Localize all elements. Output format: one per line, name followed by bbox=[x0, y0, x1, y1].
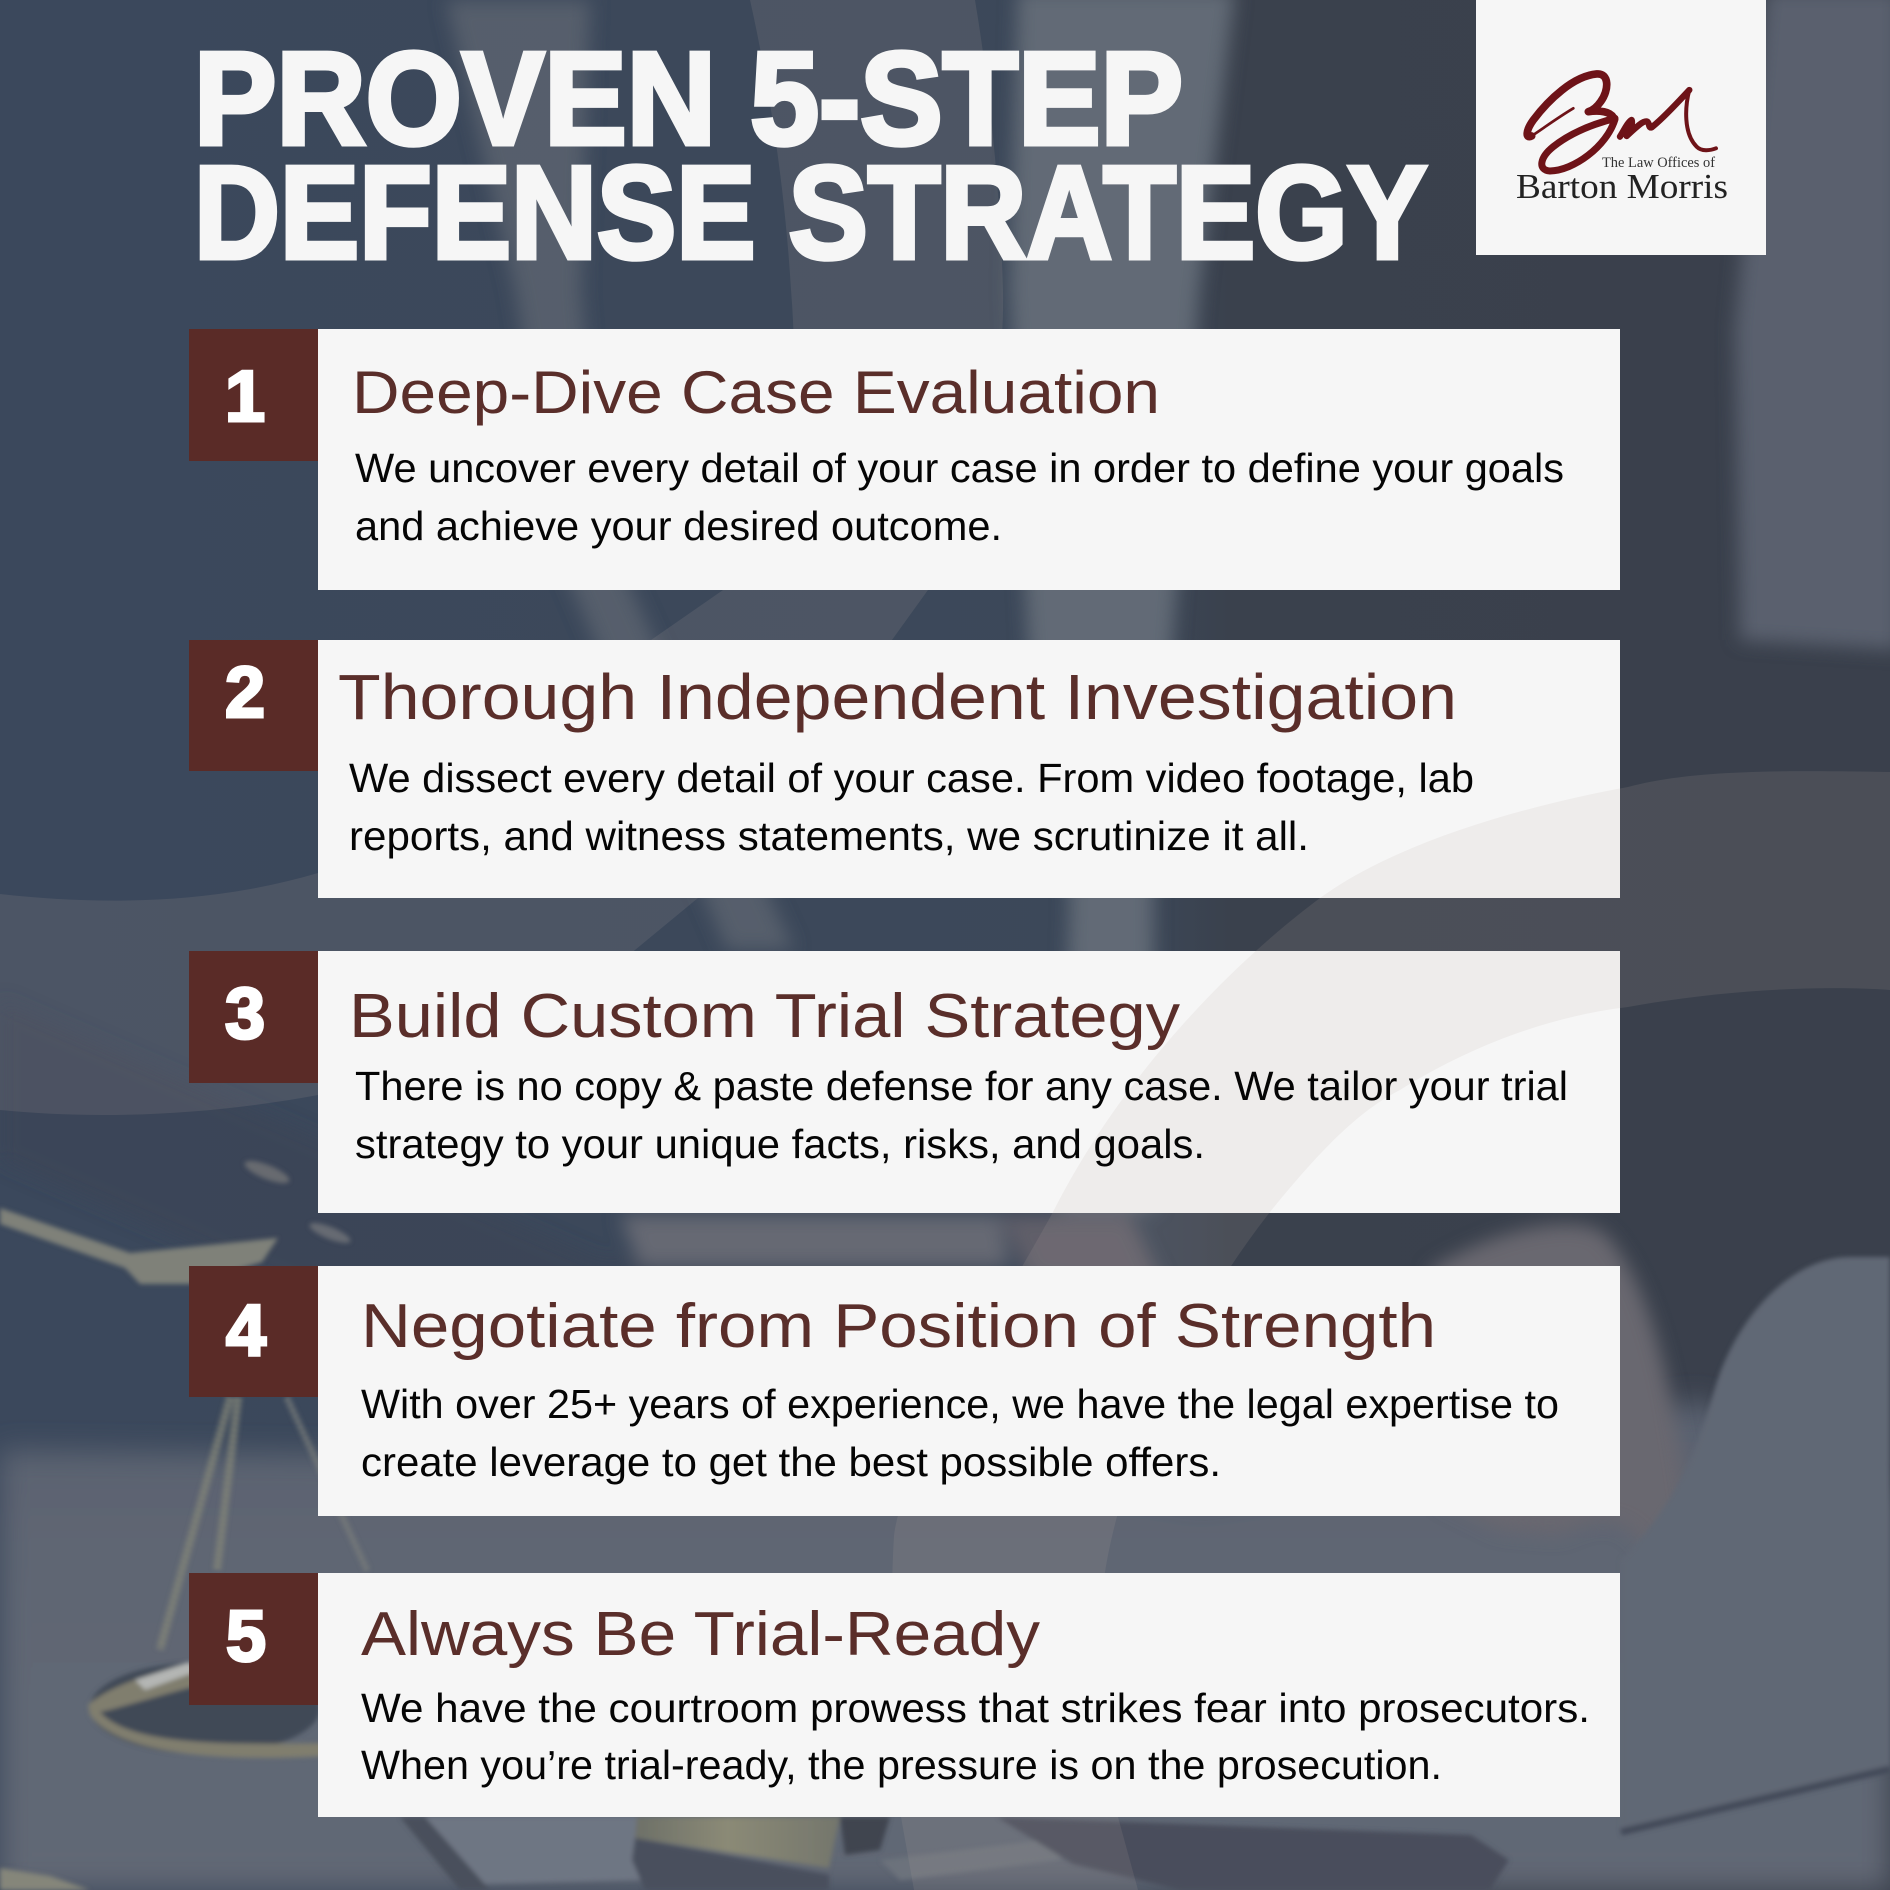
step 2 body: reports, and witness statements, we scrutinize it all. bbox=[349, 813, 1309, 859]
step 5 bbox=[189, 1573, 1620, 1817]
step 5 number badge bbox=[189, 1573, 318, 1705]
swoosh: upper-left S band bbox=[0, 0, 1003, 1115]
step 4 body: create leverage to get the best possible offers. bbox=[361, 1439, 1221, 1485]
step 5 body bbox=[361, 1685, 1590, 1788]
step 4 number badge bbox=[189, 1266, 318, 1397]
step 1 body bbox=[355, 445, 1564, 549]
card 2 panel bbox=[318, 640, 1620, 898]
step 2 body: We dissect every detail of your case. From video footage, lab bbox=[349, 755, 1474, 801]
logo text: The Law Offices of bbox=[1602, 155, 1715, 171]
step 5 card bbox=[318, 1573, 1620, 1817]
step 4 card bbox=[318, 1266, 1620, 1516]
step 5 body: We have the courtroom prowess that strikes fear into prosecutors. bbox=[361, 1685, 1590, 1731]
step 4 number badge: 4 bbox=[226, 1291, 266, 1371]
icon: BM signature mark bbox=[1527, 74, 1716, 171]
logo panel: Barton Morris bbox=[1516, 167, 1728, 206]
logo panel bbox=[1476, 0, 1766, 255]
gavel bbox=[400, 1817, 1509, 1890]
step 2 number badge: 2 bbox=[225, 653, 265, 733]
step 4 body bbox=[361, 1381, 1559, 1485]
book page, lower right bbox=[1621, 1257, 1890, 1832]
step 1 number badge bbox=[189, 329, 318, 461]
step 3 bbox=[189, 951, 1568, 1167]
title bbox=[194, 25, 1427, 286]
step 4 body: With over 25+ years of experience, we have the legal expertise to bbox=[361, 1381, 1559, 1427]
card 3 panel bbox=[318, 951, 1620, 1213]
step 1 card bbox=[318, 329, 1620, 590]
hand bbox=[1430, 1224, 1699, 1600]
step 5 number badge: 5 bbox=[226, 1597, 266, 1677]
step 1 heading: Deep-Dive Case Evaluation bbox=[352, 359, 1160, 426]
step 2 bbox=[189, 640, 1474, 859]
step 3 number badge: 3 bbox=[225, 974, 265, 1054]
table surface bbox=[0, 1400, 1890, 1890]
scale of justice bbox=[0, 1157, 367, 1890]
step 3 heading: Build Custom Trial Strategy bbox=[349, 982, 1180, 1051]
title: DEFENSE STRATEGY bbox=[194, 139, 1427, 286]
shirt stripes and suit folds bbox=[0, 0, 1890, 1300]
step 3 number badge bbox=[189, 951, 318, 1083]
step 2 number badge bbox=[189, 640, 318, 771]
title: PROVEN 5-STEP bbox=[194, 25, 1183, 172]
step 5 body: When you’re trial-ready, the pressure is on the prosecution. bbox=[361, 1742, 1442, 1788]
step 4 bbox=[189, 1266, 1620, 1516]
step 1 body: We uncover every detail of your case in order to define your goals bbox=[355, 445, 1564, 491]
step 1 number badge: 1 bbox=[225, 357, 265, 437]
step 1 bbox=[189, 329, 1620, 590]
step 3 body: There is no copy & paste defense for any case. We tailor your trial bbox=[355, 1063, 1568, 1109]
step 2 body bbox=[349, 755, 1474, 859]
step 4 heading: Negotiate from Position of Strength bbox=[361, 1292, 1436, 1361]
swoosh: large arc, lower right bbox=[892, 771, 1890, 1890]
step 5 heading: Always Be Trial-Ready bbox=[361, 1600, 1040, 1669]
step 2 heading: Thorough Independent Investigation bbox=[338, 661, 1457, 733]
step 3 body: strategy to your unique facts, risks, and goals. bbox=[355, 1121, 1205, 1167]
step 1 body: and achieve your desired outcome. bbox=[355, 503, 1002, 549]
step 3 body bbox=[355, 1063, 1568, 1167]
